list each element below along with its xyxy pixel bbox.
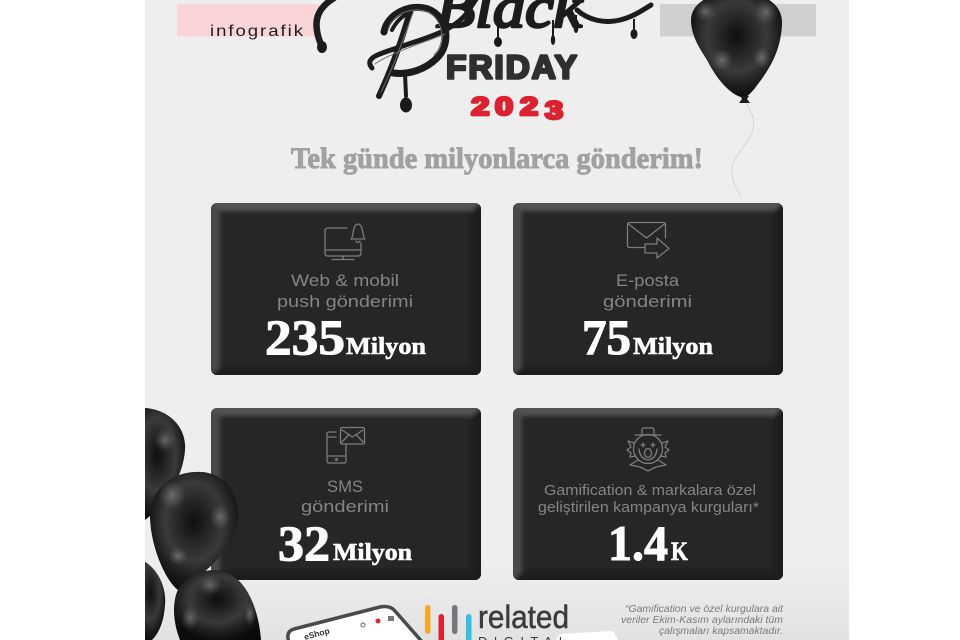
phone mockup [288,606,424,640]
panel: email [513,203,783,375]
balloon centre [150,472,238,590]
value: 235 [265,309,345,365]
grey tag behind balloon [660,4,816,36]
icon: phone with envelope [327,428,364,463]
balloon top right with string [691,0,782,197]
word FRIDAY: FRIDAY [446,50,577,86]
panel: gamification [513,408,783,580]
poster background [145,0,849,640]
value: K [671,537,689,566]
label: geliştirilen kampanya kurguları* [538,500,759,516]
ink drips [317,15,638,112]
panel: web and mobile push [211,203,481,375]
year 2023: 2023 [471,93,563,125]
label: Gamification & markalara özel [544,483,756,499]
footnote: çalışmaları kapsamaktadır. [659,625,783,637]
logo bars [425,605,472,640]
title logo: Black Friday 2023 [316,0,651,125]
footnote [621,603,784,637]
value: 75 [582,309,631,365]
panel: SMS [211,408,481,580]
value: Milyon [333,540,412,566]
script word Black [316,0,651,112]
logo: Related Digital [425,599,569,640]
value: 1.4 [608,515,668,571]
wordmark: related [478,599,569,635]
balloon far left upper [145,408,186,520]
icon: clown face [627,428,669,471]
footnote: “Gamification ve özel kurgulara ait [625,603,784,615]
value: 32 [278,515,330,571]
white card corner bottom [556,631,618,640]
balloon far left lower [145,562,166,640]
value: Milyon [346,334,426,360]
pink tag with infografik label [177,4,319,40]
value: Milyon [633,334,713,360]
label: push gönderimi [277,292,413,311]
pink tag with infografik label: infografik [210,22,303,40]
icon: monitor with bell [325,224,365,260]
balloons bottom left [145,408,261,640]
balloon bottom [174,570,261,640]
label: Web & mobil [291,271,399,290]
label: gönderimi [301,497,389,516]
label: SMS [327,477,363,496]
icon: envelope with arrow [628,222,669,258]
label: gönderimi [603,292,692,311]
label: E-posta [616,271,680,290]
headline: Tek günde milyonlarca gönderim! [291,142,703,175]
label [538,483,759,516]
footnote: veriler Ekim-Kasım aylarındaki tüm [621,614,783,626]
